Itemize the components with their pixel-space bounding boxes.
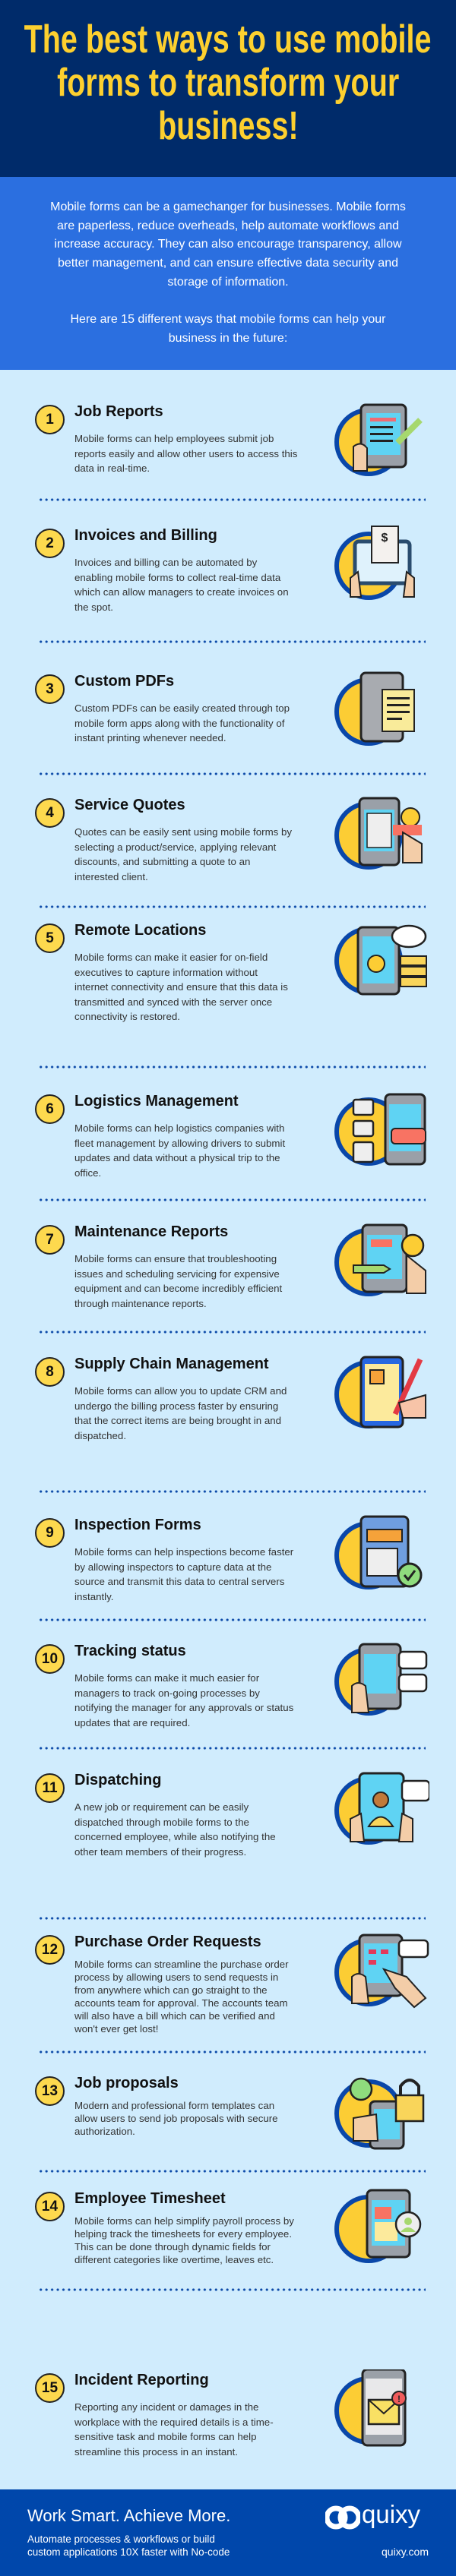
intro text: increase accuracy. They can also encourage transparency, allow [54, 238, 402, 251]
text 12 [74, 1959, 289, 2035]
text 15 [74, 2400, 274, 2459]
item 9: Inspection Forms [35, 1516, 423, 1602]
intro text: storage of information. [167, 276, 289, 289]
text 7 [74, 1253, 283, 1309]
text 9: source and transmit this data to central servers [74, 1576, 284, 1587]
text 14: Mobile forms can help simplify payroll process by [74, 2215, 294, 2227]
intro text: Here are 15 different ways that mobile forms can help your [70, 313, 386, 326]
text 7: equipment and can become incredibly efficient [74, 1283, 282, 1294]
text 10: Mobile forms can make it much easier for [74, 1672, 259, 1684]
intro text: Mobile forms can be a gamechanger for businesses. Mobile forms [50, 200, 406, 213]
logo: quixy: quixy [362, 2500, 420, 2528]
number badge 10 [35, 1644, 65, 1674]
text 12: Mobile forms can streamline the purchase order [74, 1959, 289, 1970]
text 2: enabling mobile forms to collect real-time data [74, 571, 280, 583]
divider [38, 1917, 426, 1920]
icon: maintenance phone [334, 1224, 426, 1296]
divider [38, 1198, 426, 1201]
divider [38, 2050, 426, 2054]
divider [38, 905, 426, 908]
number badge 15: 15 [42, 2380, 58, 2396]
icon: phone with user [331, 2188, 429, 2271]
item 14: Employee Timesheet [0, 2192, 456, 2275]
number badge 13: 13 [42, 2083, 58, 2099]
text 8: that the correct items are being brought in and [74, 1415, 281, 1426]
number badge 14: 14 [42, 2199, 58, 2215]
icon: invoice tablet [334, 526, 415, 600]
text 5: internet connectivity and ensure that this data is [74, 981, 288, 993]
text 7: through maintenance reports. [74, 1297, 207, 1309]
text 15: workplace with the required details is a time- [74, 2417, 274, 2427]
text 11: dispatched through mobile forms to the [74, 1817, 249, 1827]
divider [38, 2170, 426, 2173]
text 14: This can be done through dynamic fields for [74, 2241, 271, 2252]
item 11: Dispatching [35, 1772, 429, 1858]
number badge 2 [35, 529, 65, 558]
number badge 15 [35, 2373, 65, 2403]
title 4: Service Quotes [74, 797, 185, 813]
text 8: undergo the billing process faster by ensuring [74, 1400, 278, 1411]
number badge 6: 6 [46, 1101, 54, 1117]
number badge 7: 7 [46, 1232, 54, 1248]
title 9: Inspection Forms [74, 1517, 201, 1533]
title 5: Remote Locations [74, 922, 206, 939]
text 10 [74, 1672, 293, 1728]
text 4: discounts, and submitting a quote to an [74, 856, 250, 867]
title 6: Logistics Management [74, 1093, 239, 1110]
text 1 [74, 433, 297, 474]
number badge 8 [35, 1357, 65, 1387]
title 1: Job Reports [74, 403, 163, 420]
title 10: Tracking status [74, 1643, 186, 1659]
divider [38, 1747, 426, 1750]
title: business! [158, 104, 298, 148]
text 8 [74, 1385, 287, 1441]
text 11: other team members of their progress. [74, 1845, 246, 1858]
text 14: helping track the timesheets for every employee. [74, 2228, 292, 2240]
text 3 [74, 702, 290, 743]
text 12: won't ever get lost! [74, 2023, 158, 2035]
intro text: better management, and can ensure effective data security and [58, 257, 398, 270]
header [0, 0, 456, 177]
icon: phone with person [334, 1773, 429, 1845]
text 5: connectivity is restored. [74, 1011, 180, 1022]
intro text: are paperless, reduce overheads, help automate workflows and [57, 219, 399, 232]
text 8: Mobile forms can allow you to update CRM and [74, 1385, 287, 1397]
text 6: office. [74, 1166, 101, 1179]
icon: phone with chat bubbles [334, 1643, 427, 1716]
number badge 3: 3 [46, 681, 54, 697]
number badge 5 [35, 923, 65, 953]
item 10: Tracking status [35, 1643, 427, 1728]
text 5: transmitted and synced with the server once [74, 996, 272, 1007]
divider [38, 2288, 426, 2291]
title: The best ways to use mobile [24, 17, 432, 62]
text 2: the spot. [74, 601, 113, 612]
number badge 13 [35, 2076, 65, 2106]
text 1: reports easily and allow other users to access this [74, 448, 297, 459]
text 14 [74, 2215, 294, 2266]
text 5: Mobile forms can make it easier for on-field [74, 952, 268, 963]
number badge 4: 4 [46, 805, 54, 821]
title: forms to transform your [57, 61, 399, 105]
text 10: managers to track on-going processes by [74, 1687, 260, 1698]
text 3: instant printing whenever needed. [74, 732, 226, 743]
text 1: data in real-time. [74, 462, 150, 474]
tagline: Work Smart. Achieve More. [27, 2506, 230, 2525]
text 11: A new job or requirement can be easily [74, 1801, 249, 1813]
text 7: issues and scheduling servicing for expensive [74, 1268, 280, 1279]
text 8: dispatched. [74, 1429, 126, 1441]
text 2: Invoices and billing can be automated by [74, 557, 257, 568]
number badge 7 [35, 1225, 65, 1255]
footer subtext: Automate processes & workflows or build [27, 2533, 215, 2545]
text 3: mobile form apps along with the functionality of [74, 717, 284, 729]
text 6 [74, 1122, 286, 1179]
text 11: concerned employee, while also notifying the [74, 1831, 276, 1842]
text 4: Quotes can be easily sent using mobile forms by [74, 826, 292, 838]
icon: tablet with pen [334, 404, 423, 476]
footer subtext [27, 2533, 230, 2559]
item 3: Custom PDFs [35, 671, 415, 746]
divider [38, 498, 426, 501]
number badge 9 [35, 1518, 65, 1548]
footer [0, 2489, 456, 2576]
title 2: Invoices and Billing [74, 527, 217, 544]
text 10: updates that are required. [74, 1716, 190, 1728]
title 12: Purchase Order Requests [74, 1934, 261, 1950]
title 11: Dispatching [74, 1772, 161, 1788]
number badge 14 [35, 2192, 65, 2221]
text 6: Mobile forms can help logistics companies with [74, 1122, 284, 1134]
text 13: authorization. [74, 2126, 135, 2137]
text 13: allow users to send job proposals with secure [74, 2113, 278, 2124]
text 5 [74, 952, 288, 1022]
item 5: Remote Locations [35, 922, 427, 1022]
text 9: by allowing inspectors to capture data at the [74, 1561, 271, 1572]
text 12: accounts team for approval. The accounts team [74, 1997, 288, 2009]
number badge 11 [35, 1773, 65, 1803]
item 7: Maintenance Reports [35, 1223, 426, 1309]
number badge 5: 5 [46, 930, 54, 946]
divider [38, 1331, 426, 1334]
text 10: notifying the manager for any approvals or status [74, 1702, 293, 1713]
text 12: process by allowing users to send requests in [74, 1971, 278, 1983]
footer subtext: custom applications 10X faster with No-code [27, 2546, 230, 2558]
text 1: Mobile forms can help employees submit job [74, 433, 274, 444]
number badge 8: 8 [46, 1364, 54, 1380]
icon: phone with tapping hand [334, 1934, 429, 2008]
divider [38, 640, 426, 643]
item 15: Incident Reporting [0, 2373, 456, 2457]
item 8: Supply Chain Management [35, 1356, 426, 1441]
divider [38, 1490, 426, 1493]
icon: phone with gear [334, 797, 423, 870]
item 2: Invoices and Billing [35, 526, 415, 612]
number badge 12: 12 [42, 1942, 58, 1958]
number badge 1 [35, 405, 65, 434]
text 2 [74, 557, 289, 612]
icon: phone with alert mail: ! [397, 2394, 401, 2404]
item 12: Purchase Order Requests [35, 1934, 429, 2035]
text 5: executives to capture information without [74, 966, 258, 978]
text 4: interested client. [74, 870, 148, 882]
text 9 [74, 1546, 293, 1602]
text 3: Custom PDFs can be easily created through top [74, 702, 290, 714]
text 15: Reporting any incident or damages in the [74, 2401, 258, 2413]
icon: phone with alert mail [331, 2369, 429, 2453]
text 14: different categories like overtime, leaves etc. [74, 2254, 274, 2265]
divider [38, 1618, 426, 1621]
text 13: Modern and professional form templates can [74, 2100, 274, 2111]
title 13: Job proposals [74, 2075, 179, 2091]
item 13: Job proposals [35, 2075, 424, 2149]
icon: invoice tablet: $ [382, 532, 388, 545]
title 15: Incident Reporting [74, 2372, 209, 2388]
title 3: Custom PDFs [74, 673, 174, 690]
text 12: will also have a bill which can be verified and [74, 2010, 275, 2022]
icon: phone with document [334, 671, 415, 746]
text 15: streamline this process in an instant. [74, 2445, 238, 2458]
icon: inspection phone with check [334, 1516, 423, 1589]
icon: logistics phone [334, 1094, 426, 1166]
title [24, 17, 432, 148]
text 2: which can allow managers to create invoices on [74, 586, 289, 598]
item 1: Job Reports [35, 403, 423, 476]
website: quixy.com [382, 2546, 429, 2558]
item 4: Service Quotes [35, 797, 423, 882]
icon: phone cloud server [334, 925, 427, 995]
number badge 12 [35, 1935, 65, 1965]
icon: signing phone [334, 1356, 426, 1428]
number badge 6 [35, 1094, 65, 1124]
number badge 4 [35, 798, 65, 828]
text 7: Mobile forms can ensure that troubleshooting [74, 1253, 277, 1264]
text 6: updates and data without a physical trip to the [74, 1152, 280, 1163]
icon: phone with lock [334, 2078, 424, 2149]
title 8: Supply Chain Management [74, 1356, 269, 1372]
text 6: fleet management by allowing drivers to submit [74, 1138, 285, 1148]
number badge 1: 1 [46, 412, 54, 428]
text 4 [74, 826, 292, 882]
title 14: Employee Timesheet [74, 2190, 226, 2207]
divider [38, 772, 426, 775]
text 4: selecting a product/service, applying relevant [74, 841, 276, 852]
number badge 2: 2 [46, 535, 54, 551]
text 11 [74, 1801, 276, 1858]
title 7: Maintenance Reports [74, 1223, 228, 1240]
number badge 11: 11 [42, 1780, 58, 1796]
text 12: from anywhere which can go straight to the [74, 1984, 268, 1996]
intro text: business in the future: [169, 332, 287, 345]
text 15: sensitive task and mobile forms can help [74, 2431, 256, 2442]
number badge 9: 9 [46, 1525, 54, 1541]
logo: quixy [325, 2502, 432, 2532]
item 6: Logistics Management [35, 1093, 426, 1179]
number badge 10: 10 [42, 1651, 58, 1667]
text 9: instantly. [74, 1590, 114, 1602]
divider [38, 1065, 426, 1069]
number badge 3 [35, 674, 65, 704]
text 9: Mobile forms can help inspections become faster [74, 1546, 293, 1558]
text 13 [74, 2100, 278, 2137]
intro text [0, 177, 456, 370]
